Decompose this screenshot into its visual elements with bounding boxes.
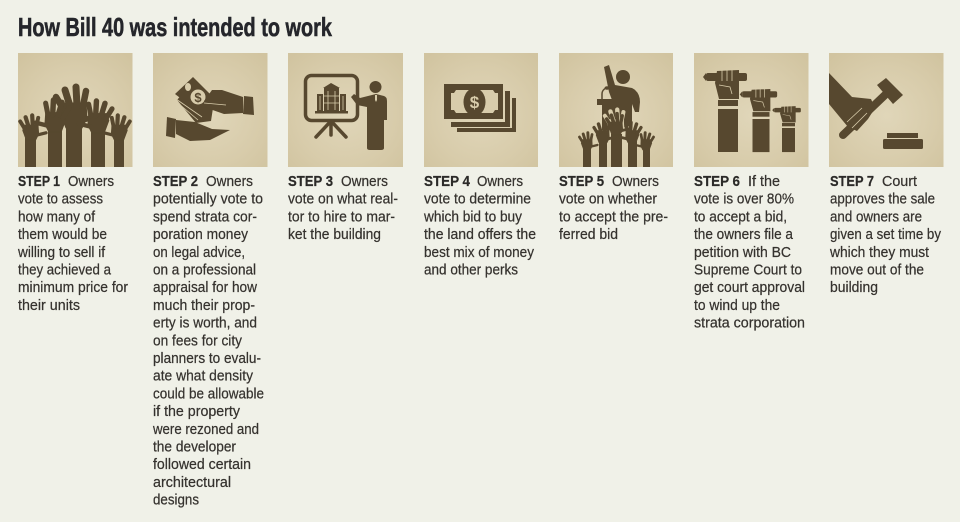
text: step 2: on fees for city — [153, 333, 243, 349]
text: step 1: vote to assess — [18, 192, 103, 208]
panel: step 3 — [288, 53, 403, 167]
icon: hand with gavel — [829, 73, 923, 149]
text: step 4: which bid to buy — [423, 209, 523, 225]
icon: stacks of cash: $ — [470, 93, 480, 112]
text: step 2: could be allowable — [153, 386, 264, 402]
text: step 3: STEP 3 — [288, 174, 333, 190]
title: How Bill 40 was intended to work — [18, 12, 332, 42]
text: step 2: designs — [153, 493, 199, 509]
text: step 2 — [152, 174, 264, 509]
panel: step 2 — [153, 53, 268, 167]
text: step 7: which they must — [829, 245, 929, 261]
text: step 3 — [288, 174, 398, 243]
text: step 6: STEP 6 — [694, 174, 740, 190]
icon: presenter with building — [306, 76, 387, 150]
text: step 1 — [17, 174, 128, 314]
text: step 1: Owners — [68, 174, 114, 190]
text: step 6: Supreme Court to — [694, 262, 802, 278]
text: step 6: get court approval — [694, 280, 805, 296]
text: step 5: Owners — [612, 174, 659, 190]
text: step 2: the developer — [153, 440, 236, 456]
text: step 6: to wind up the — [694, 298, 780, 314]
text: step 2: Owners — [206, 174, 253, 190]
text: step 2: poration money — [153, 227, 249, 243]
text: step 1: their units — [18, 298, 80, 314]
text: step 3: tor to hire to mar- — [288, 209, 395, 225]
text: step 2: were rezoned and — [152, 422, 259, 438]
text: step 2: architectural — [153, 475, 231, 491]
text: step 6: If the — [748, 174, 780, 190]
text: step 2: erty is worth, and — [153, 316, 257, 332]
text: step 3: vote on what real- — [288, 192, 398, 208]
text: step 7: move out of the — [830, 262, 924, 278]
text: step 5 — [559, 174, 668, 243]
text: step 1: them would be — [18, 227, 107, 243]
text: step 7: STEP 7 — [830, 174, 874, 190]
text: step 1: willing to sell if — [17, 245, 106, 261]
text: step 2: planners to evalu- — [153, 351, 261, 367]
text: step 4: STEP 4 — [424, 174, 470, 190]
text: step 6: the owners file a — [694, 227, 794, 243]
icon: raised hands — [20, 87, 130, 167]
text: step 6: vote is over 80% — [694, 192, 794, 208]
text: step 1: how many of — [18, 209, 96, 225]
text: step 3: Owners — [341, 174, 388, 190]
text: step 5: to accept the pre- — [559, 209, 668, 225]
text: step 5: ferred bid — [559, 227, 618, 243]
text: step 2: potentially vote to — [153, 192, 263, 208]
text: step 7: approves the sale — [830, 192, 935, 208]
text: step 4: Owners — [477, 174, 523, 190]
text: step 2: on a professional — [153, 262, 256, 278]
text: step 4 — [423, 174, 536, 278]
text: step 7: building — [830, 280, 878, 296]
text: step 6: strata corporation — [694, 316, 805, 332]
text: step 2: much their prop- — [153, 298, 255, 314]
text: step 2: if the property — [153, 404, 241, 420]
text: step 1: STEP 1 — [18, 174, 60, 190]
icon: money changing hands: $ — [194, 90, 202, 105]
text: step 2: STEP 2 — [153, 174, 198, 190]
text: step 6: petition with BC — [694, 245, 791, 261]
text: step 7: given a set time by — [830, 227, 942, 243]
text: step 7: Court — [882, 174, 917, 190]
text: step 2: followed certain — [153, 457, 251, 473]
text: step 4: best mix of money — [424, 245, 535, 261]
text: step 6 — [694, 174, 805, 332]
text: step 4: the land offers the — [424, 227, 536, 243]
text: step 2: ate what density — [153, 369, 254, 385]
text: step 5: STEP 5 — [559, 174, 604, 190]
text: step 2: on legal advice, — [153, 245, 245, 261]
icon: speaker at podium with raised hands — [579, 65, 654, 167]
text: step 7 — [829, 174, 942, 296]
text: step 2: appraisal for how — [153, 280, 257, 296]
panel: step 5 — [559, 53, 673, 167]
text: step 4: vote to determine — [424, 192, 531, 208]
text: step 6: to accept a bid, — [694, 209, 787, 225]
panel: step 4 — [424, 53, 538, 167]
text: step 1: minimum price for — [18, 280, 128, 296]
text: step 2: spend strata cor- — [153, 209, 257, 225]
panel: step 7 — [829, 53, 944, 167]
text: step 4: and other perks — [424, 262, 518, 278]
text: step 7: and owners are — [830, 209, 922, 225]
panel: step 1 — [18, 53, 132, 167]
text: step 1: they achieved a — [18, 262, 112, 278]
icon: three fists holding pens — [703, 70, 801, 152]
text: step 3: ket the building — [288, 227, 381, 243]
panel: step 6 — [694, 53, 808, 167]
text: step 5: vote on whether — [559, 192, 657, 208]
